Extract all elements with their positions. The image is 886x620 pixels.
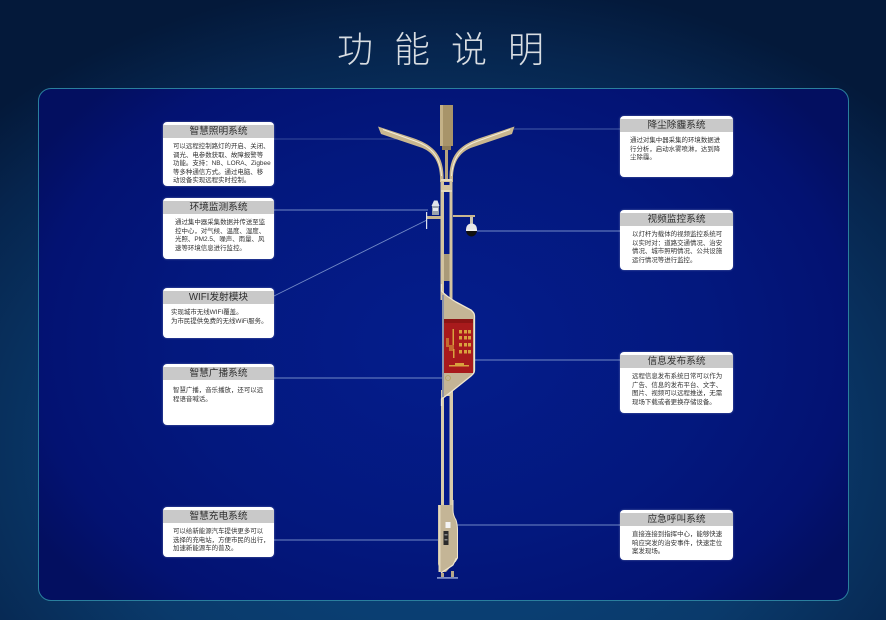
heading (620, 355, 733, 368)
title: 功能说明 (337, 29, 565, 70)
text block (632, 230, 722, 264)
text block (173, 528, 270, 552)
icon: camera (453, 215, 477, 236)
heading: 智慧广播系统 (189, 368, 248, 379)
icon: display cabinet (442, 284, 474, 406)
text block: 图片、视频可以远程推送，无需 (632, 390, 722, 397)
heading (620, 513, 733, 526)
text block: 等多种通信方式。通过电脑、移 (173, 168, 263, 176)
icon: upper pole (440, 179, 452, 300)
heading (163, 125, 274, 138)
text block (630, 136, 720, 161)
text block: 运行情况等进行监控。 (632, 256, 696, 264)
heading: 信息发布系统 (647, 356, 706, 367)
icon: antenna cylinder (440, 105, 453, 180)
heading (163, 367, 274, 380)
text block: 程语音喊话。 (173, 396, 212, 402)
text block: 远程信息发布系统日常可以作为 (632, 373, 722, 380)
text block: 调光、电参数获取、故障报警等 (173, 152, 263, 158)
heading: 降尘除霾系统 (647, 120, 706, 131)
card: dust removal (620, 116, 733, 177)
leader lines (274, 129, 622, 540)
text block: 案发现场。 (632, 548, 664, 555)
heading (163, 201, 274, 214)
card: smart lighting (163, 122, 274, 186)
text block: 情况、城市照明情况、公共设施 (632, 248, 722, 255)
text block: 以实时对：道路交通情况、治安 (632, 240, 722, 246)
card: video surveillance (620, 210, 733, 270)
text block: 选择的充电站，方便市民的出行， (173, 536, 270, 544)
panel: main frame (38, 88, 849, 601)
heading: WIFI发射模块 (189, 292, 248, 303)
text block: 现场下载或者更换存储设备。 (632, 398, 716, 406)
text block: 加速新能源车的普及。 (173, 545, 237, 552)
text block: 控中心，对气候、温度、湿度、 (175, 228, 265, 234)
text block: 尘除霾。 (630, 154, 656, 161)
heading: 智慧照明系统 (189, 126, 248, 137)
text block: 光照、PM2.5、噪声、雨量、风 (175, 236, 264, 243)
text block: 可以给新能源汽车提供更多可以 (173, 528, 263, 535)
text block: 响应突发的治安事件，快速定位 (632, 540, 722, 546)
text block: 以灯杆为载体的视频监控系统可 (632, 231, 722, 238)
text block: 通过对集中器采集的环境数据进 (630, 137, 720, 144)
card: smart broadcast (163, 364, 274, 425)
icon: charging base (437, 500, 458, 579)
icon: left lamp arm (378, 126, 444, 182)
heading (163, 291, 274, 304)
text block (632, 372, 722, 406)
card: emergency call (620, 510, 733, 560)
heading: 视频监控系统 (647, 214, 706, 225)
card: environment monitoring (163, 198, 274, 259)
text block: 直接连接到指挥中心，能够快速 (632, 531, 722, 538)
heading: 环境监测系统 (189, 202, 248, 213)
text block: 智慧广播，音乐播放，还可以远 (173, 387, 263, 394)
text block: 行分析，启动水雾喷淋，达到降 (630, 146, 720, 152)
text block: 为市民提供免费的无线WiFi服务。 (171, 318, 268, 324)
text block (175, 218, 265, 252)
heading: 应急呼叫系统 (647, 514, 706, 525)
text block: 实现城市无线WIFI覆盖。 (171, 309, 243, 316)
text block (171, 308, 268, 324)
icon: lower pole (441, 390, 453, 515)
heading: 智慧充电系统 (189, 511, 248, 522)
text block: 广告、信息的发布平台、文字、 (632, 382, 722, 388)
icon: red information screen (444, 319, 473, 373)
text block: 速等环境信息进行监控。 (175, 244, 246, 252)
icon: right lamp arm (450, 126, 514, 182)
text block (632, 530, 722, 555)
text block: 动设备实现远程实时控制。 (173, 177, 250, 184)
card: WIFI (163, 288, 274, 338)
heading (620, 119, 733, 132)
text block: 可以远程控制路灯的开启、关闭、 (173, 143, 270, 150)
text block: 通过集中器采集数据并传送至监 (175, 219, 265, 226)
text block (173, 386, 263, 402)
text block (173, 142, 271, 184)
icon: environment sensor (426, 200, 441, 229)
heading (163, 510, 274, 523)
card: smart charging (163, 507, 274, 557)
card: information publishing (620, 352, 733, 413)
text block: 功能。支持：NB、LORA、Zigbee (173, 160, 271, 167)
heading (620, 213, 733, 226)
